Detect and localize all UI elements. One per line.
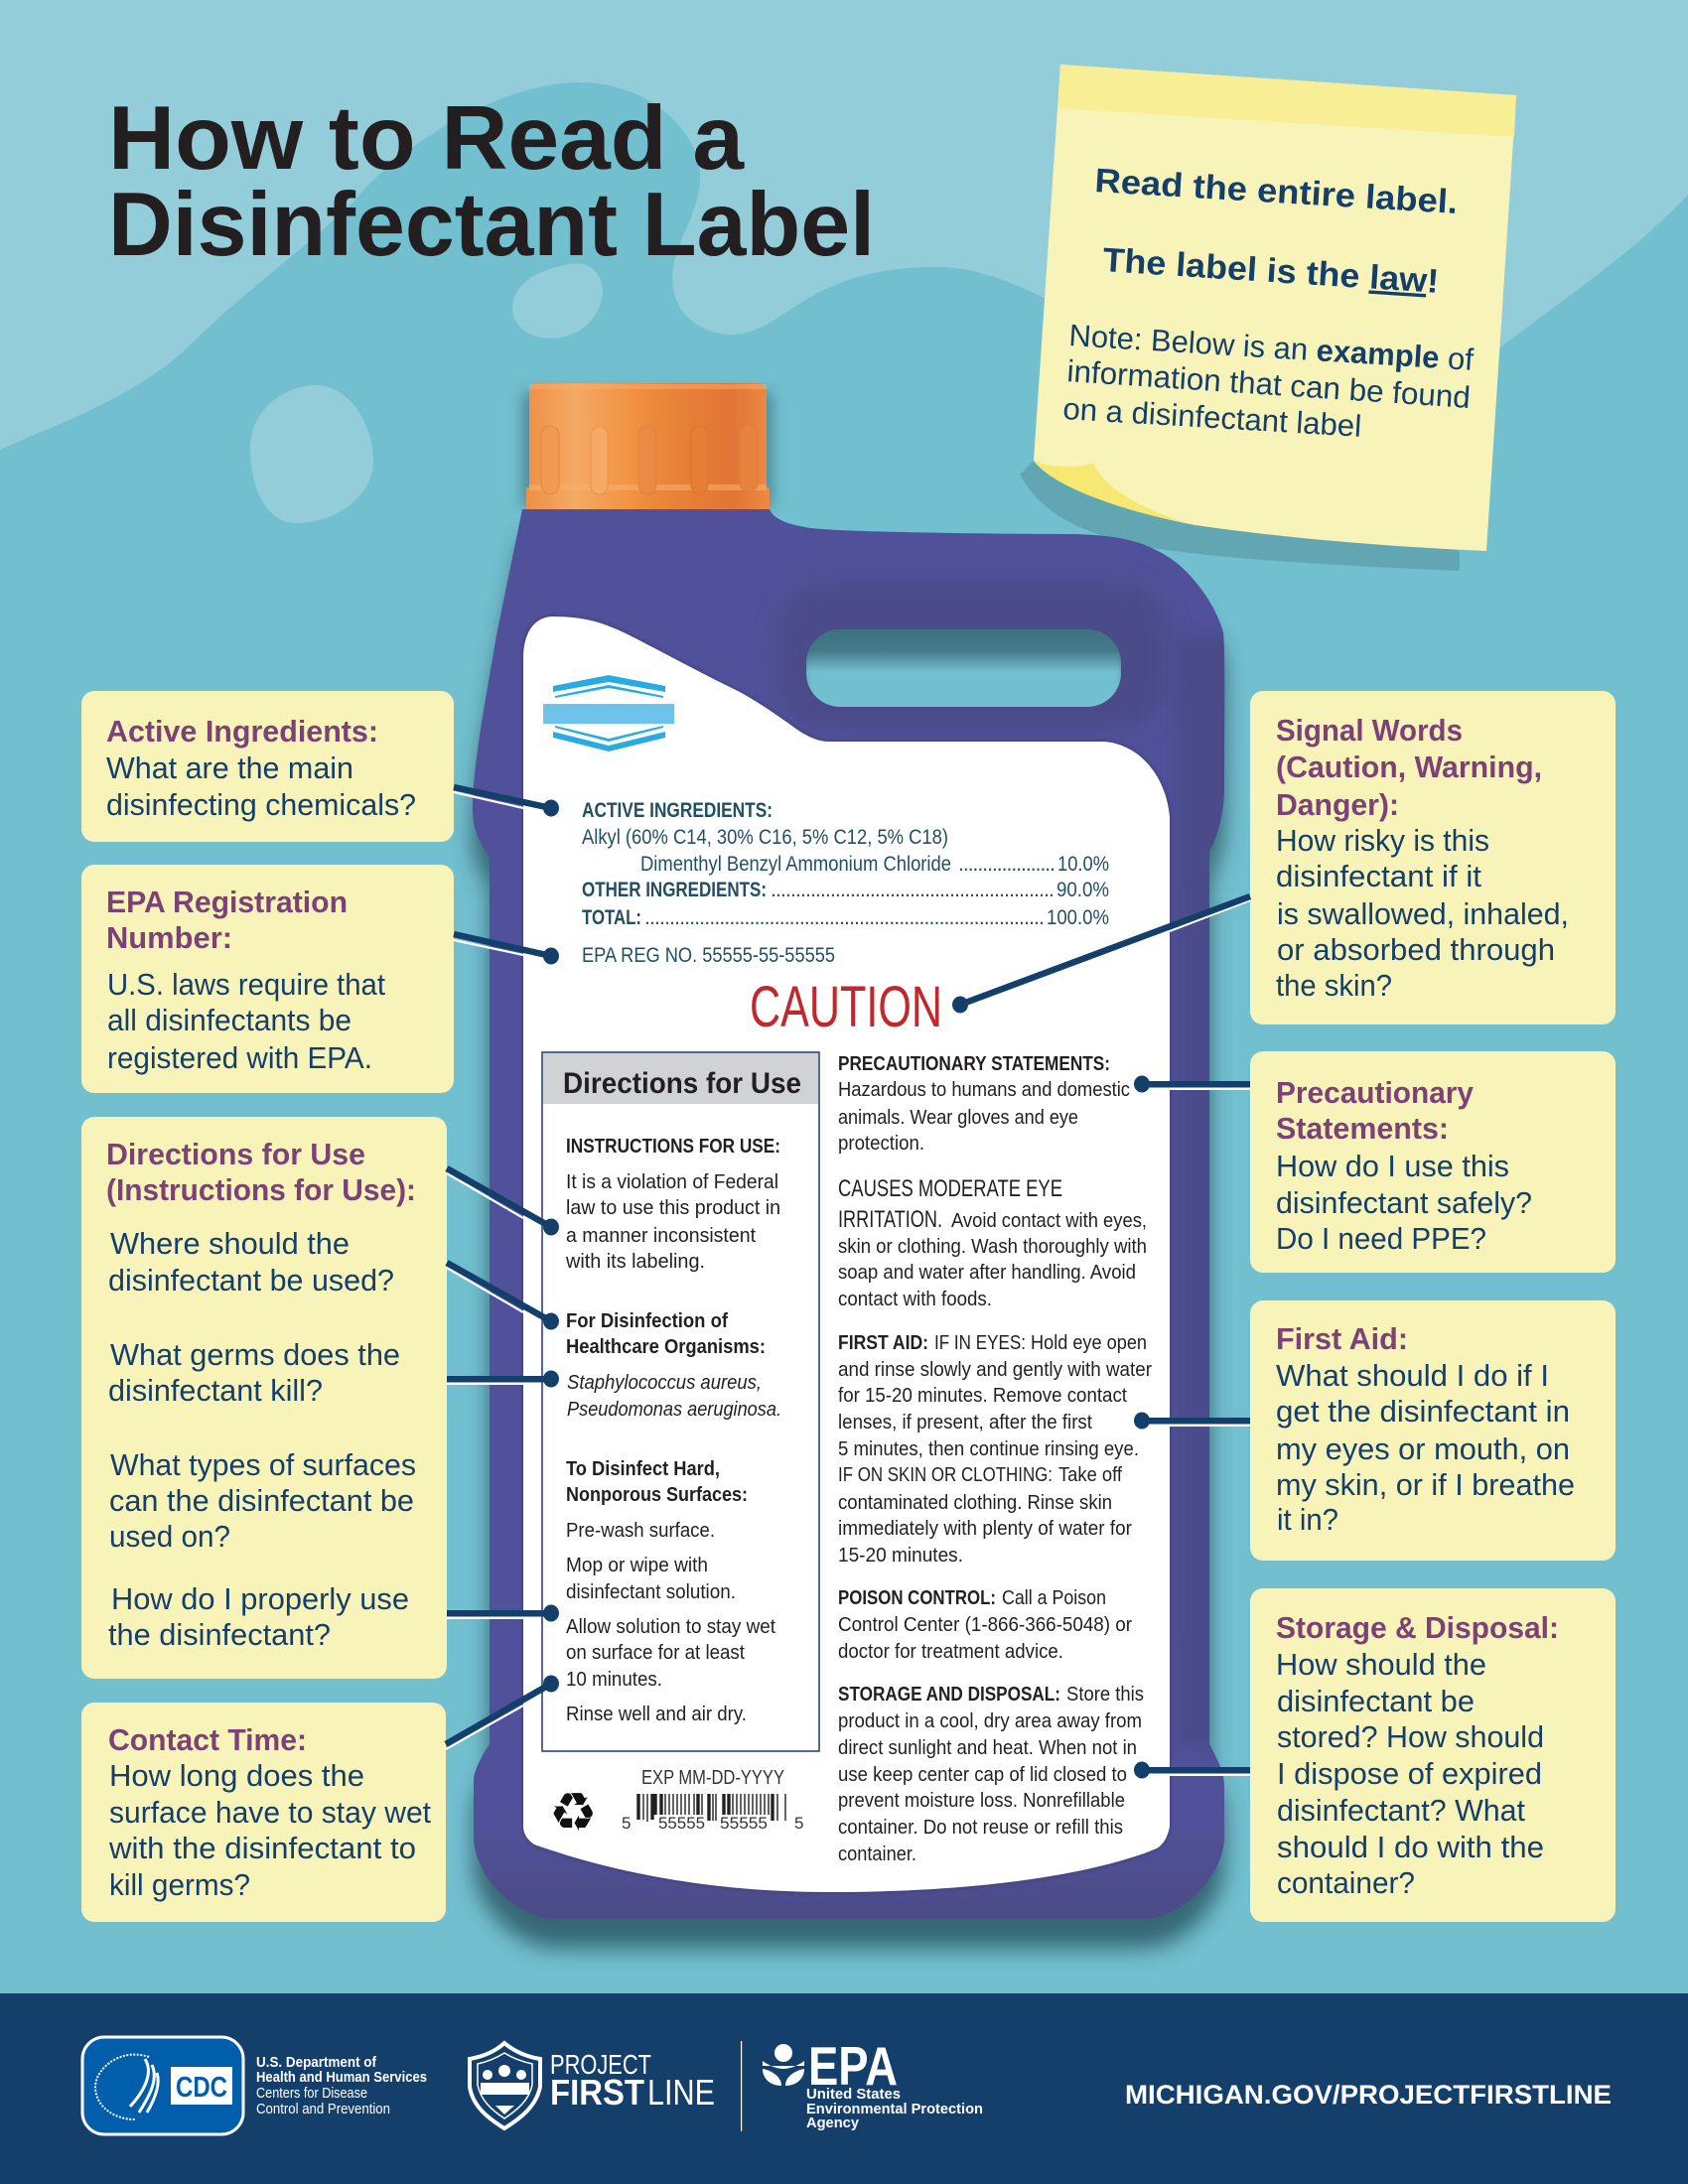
first aid text: IF IN EYES: [934,1331,1026,1354]
icon: recycling symbol: ♻ [549,1781,597,1843]
logo: Project Firstline: LINE [647,2072,715,2113]
precautionary statements text: soap and water after handling. Avoid [838,1261,1136,1284]
first aid text: for 15-20 minutes. Remove contact [838,1384,1127,1407]
panel: directions for use: 10 minutes. [566,1668,662,1691]
expiration date and barcode [622,1767,803,1833]
callout: signal words: (Caution, Warning, [1276,750,1542,784]
ingredient statement: ACTIVE INGREDIENTS: [582,799,773,822]
first aid text: lenses, if present, after the first [838,1411,1092,1433]
callout: precautionary statements: disinfectant safely? [1276,1185,1532,1220]
panel: directions for use: Allow solution to stay wet [566,1615,775,1638]
storage and disposal text: STORAGE AND DISPOSAL: [838,1683,1060,1706]
expiration date and barcode: 5 [794,1814,803,1833]
callout: signal words: How risky is this [1276,823,1489,858]
callout: EPA registration number: registered with EPA. [107,1040,372,1075]
callout: signal words [1250,691,1616,1024]
callout: signal words: the skin? [1276,968,1392,1003]
first aid text: FIRST AID: [838,1331,928,1354]
ingredient statement: OTHER INGREDIENTS: [582,879,767,901]
callout: first aid [1250,1300,1616,1561]
first aid text: immediately with plenty of water for [838,1517,1132,1540]
callout: storage and disposal: disinfectant be [1277,1684,1475,1718]
poison control text: doctor for treatment advice. [838,1640,1063,1663]
logo: EPA [763,2035,983,2131]
expiration date and barcode: 55555 [720,1814,768,1833]
callout: active ingredients [81,691,454,842]
callout: first aid: it in? [1277,1502,1338,1537]
storage and disposal text: container. Do not reuse or refill this [838,1816,1123,1839]
callout: storage and disposal: should I do with the [1277,1830,1544,1864]
callout: storage and disposal: How should the [1276,1647,1486,1682]
footer [0,1993,1688,2184]
panel: directions for use: INSTRUCTIONS FOR USE: [566,1135,780,1158]
panel: directions for use: Pre-wash surface. [566,1519,715,1542]
ingredient statement: ................................................................................ [644,906,1045,929]
storage and disposal text: use keep center cap of lid closed to [838,1763,1127,1786]
precautionary statements text: animals. Wear gloves and eye [838,1106,1078,1129]
callout: signal words: or absorbed through [1277,932,1555,967]
logo: CDC and HHS: U.S. Department of [256,2055,376,2071]
callout: contact time: How long does the [109,1758,364,1793]
panel: directions for use: For Disinfection of [566,1309,728,1332]
callout: contact time: surface have to stay wet [109,1795,431,1830]
leader line: precautionary statements [1134,1076,1250,1092]
leader line: surfaces [447,1370,559,1388]
callout: storage and disposal: disinfectant? What [1277,1793,1525,1828]
callout: signal words: Signal Words [1276,713,1463,748]
leader line: proper use [447,1604,559,1622]
precautionary statements text [838,1052,1147,1310]
logo: CDC and HHS: Control and Prevention [256,2102,390,2117]
callout: directions for use: How do I properly use [111,1581,409,1616]
callout: signal words: Danger): [1276,787,1399,822]
callout: directions for use: the disinfectant? [108,1617,331,1652]
callout: signal words: is swallowed, inhaled, [1277,896,1569,931]
storage and disposal text [838,1683,1144,1865]
EPA registration number: EPA REG NO. 55555-55-55555 [582,944,835,967]
callout: storage and disposal: Storage & Disposal: [1276,1610,1559,1645]
panel: directions for use: a manner inconsistent [566,1224,756,1247]
title: Disinfectant Label [108,175,875,275]
panel: directions for use: To Disinfect Hard, [566,1457,720,1480]
callout: directions for use: Directions for Use [106,1137,365,1171]
callout: first aid: my eyes or mouth, on [1276,1432,1570,1466]
panel: directions for use: Mop or wipe with [566,1554,708,1576]
expiration date and barcode: 55555 [658,1814,705,1833]
callout: precautionary statements [1250,1051,1616,1273]
expiration date and barcode: EXP MM-DD-YYYY [641,1767,784,1789]
logo: EPA: Agency [806,2116,859,2131]
callout: first aid: get the disinfectant in [1276,1394,1570,1429]
callout: storage and disposal [1250,1588,1616,1922]
storage and disposal text: Store this [1066,1683,1144,1706]
panel: directions for use [542,1052,819,1751]
callout: directions for use: What types of surfaces [110,1447,416,1482]
precautionary statements text: IRRITATION. [838,1206,942,1233]
storage and disposal text: prevent moisture loss. Nonrefillable [838,1789,1125,1812]
callout: active ingredients: Active Ingredients: [106,714,378,749]
callout: contact time: kill germs? [109,1867,250,1902]
sticky note: Note: Below is an example of [1068,318,1475,377]
callout: directions for use [81,1117,447,1679]
callout: signal words: disinfectant if it [1276,859,1481,893]
storage and disposal text: direct sunlight and heat. When not in [838,1736,1137,1759]
callout: directions for use: disinfectant kill? [108,1373,323,1408]
first aid text: 15-20 minutes. [838,1544,963,1567]
ingredient statement: 100.0% [1047,906,1109,929]
panel: directions for use: Rinse well and air dry. [566,1703,747,1725]
logo: Project Firstline: PROJECT [550,2049,651,2080]
precautionary statements text: protection. [838,1132,924,1155]
logo: EPA: United States [806,2087,901,2103]
panel: directions for use: Healthcare Organisms: [566,1335,766,1358]
ingredient statement: ......................................................... [771,879,1055,901]
first aid text: Hold eye open [1031,1331,1147,1354]
precautionary statements text: Avoid contact with eyes, [951,1209,1147,1232]
website url: MICHIGAN.GOV/PROJECTFIRSTLINE [1125,2080,1612,2110]
callout: contact time [81,1703,446,1922]
ingredient statement [582,799,1109,929]
leader line: contact time [446,1676,559,1749]
callout: storage and disposal: stored? How should [1277,1719,1544,1754]
callout: directions for use: can the disinfectant be [109,1483,414,1518]
ingredient statement: Alkyl (60% C14, 30% C16, 5% C12, 5% C18) [582,826,948,849]
ingredient statement: .................... [958,853,1055,876]
logo: EPA: Environmental Protection [806,2102,983,2117]
precautionary statements text: Hazardous to humans and domestic [838,1078,1130,1101]
poison control text: Control Center (1-866-366-5048) or [838,1613,1132,1636]
panel: directions for use: It is a violation of Federal [566,1170,778,1193]
callout: storage and disposal: I dispose of expired [1277,1756,1542,1791]
leader line: storage and disposal [1134,1761,1250,1779]
callout: first aid: my skin, or if I breathe [1276,1467,1575,1502]
bottle label [523,616,1170,1892]
sticky note: on a disinfectant label [1062,391,1362,444]
first aid text [838,1331,1152,1567]
precautionary statements text: PRECAUTIONARY STATEMENTS: [838,1052,1110,1075]
logo: CDC and HHS [82,2037,427,2134]
callout: first aid: What should I do if I [1276,1358,1549,1393]
precautionary statements text: CAUSES MODERATE EYE [838,1175,1062,1202]
first aid text: contaminated clothing. Rinse skin [838,1491,1112,1514]
ingredient statement: 10.0% [1057,853,1109,876]
ingredient statement: TOTAL: [582,906,641,929]
callout: EPA registration number: all disinfectants be [107,1003,352,1037]
callout: precautionary statements: How do I use this [1276,1149,1509,1183]
leader line: germs [447,1263,559,1330]
first aid text: 5 minutes, then continue rinsing eye. [838,1437,1139,1460]
callout: precautionary statements: Statements: [1276,1111,1449,1146]
sticky note [1020,65,1516,571]
poison control text [838,1586,1132,1663]
callout: active ingredients: disinfecting chemicals? [106,787,416,822]
first aid text: Take off [1058,1463,1122,1486]
logo: Project Firstline: FIRST [550,2072,644,2113]
first aid text: IF ON SKIN OR CLOTHING: [838,1463,1053,1486]
precautionary statements text: skin or clothing. Wash thoroughly with [838,1235,1147,1258]
logo: EPA: EPA [808,2035,898,2097]
signal word: CAUTION [750,975,942,1039]
callout: directions for use: (Instructions for Use): [106,1172,416,1207]
panel: directions for use: Staphylococcus aureus, [567,1371,762,1394]
panel: directions for use: with its labeling. [565,1250,705,1273]
callout: contact time: Contact Time: [108,1722,307,1757]
storage and disposal text: container. [838,1843,916,1865]
panel: directions for use: Nonporous Surfaces: [566,1483,748,1506]
callout: precautionary statements: Precautionary [1276,1075,1475,1110]
leader line: EPA registration [454,934,559,965]
expiration date and barcode: 5 [622,1814,631,1833]
callout: active ingredients: What are the main [106,751,353,785]
callout: directions for use: Where should the [110,1226,350,1261]
storage and disposal text: product in a cool, dry area away from [838,1709,1142,1732]
callout: EPA registration number: Number: [106,920,232,955]
ingredient statement: 90.0% [1056,879,1109,901]
precautionary statements text: contact with foods. [838,1288,992,1310]
ingredient statement: Dimenthyl Benzyl Ammonium Chloride [640,853,951,876]
callout: storage and disposal: container? [1277,1865,1415,1900]
panel: directions for use: on surface for at least [566,1641,745,1664]
icon: product logo [543,675,674,751]
logo: CDC and HHS: Health and Human Services [256,2070,427,2086]
callout: directions for use: What germs does the [110,1337,400,1372]
title [108,88,875,275]
leader line: signal words [952,896,1250,1013]
leader line: first aid [1134,1412,1250,1430]
logo: CDC and HHS: CDC [176,2072,227,2104]
first aid text: and rinse slowly and gently with water [838,1358,1152,1381]
callout: directions for use: used on? [109,1519,230,1554]
leader line: active ingredients [454,787,559,816]
panel: directions for use: Directions for Use [563,1067,801,1100]
bottle [473,383,1236,1949]
panel: directions for use: law to use this product in [566,1196,780,1219]
poison control text: POISON CONTROL: [838,1586,996,1609]
callout: EPA registration number: EPA Registration [106,885,348,919]
callout: precautionary statements: Do I need PPE? [1276,1221,1486,1256]
sticky note: The label is the law! [1101,241,1440,301]
bottle cap [526,383,770,509]
callout: directions for use: disinfectant be used? [108,1263,394,1297]
sticky note: information that can be found [1066,353,1472,415]
leader line: where to use [447,1168,559,1235]
callout: first aid: First Aid: [1276,1321,1408,1356]
logo: Project Firstline [470,2043,715,2128]
callout: EPA registration number: U.S. laws require that [107,967,385,1002]
logo: CDC and HHS: Centers for Disease [256,2086,367,2102]
poison control text: Call a Poison [1002,1586,1106,1609]
handle opening [806,629,1121,707]
callout: contact time: with the disinfectant to [108,1831,416,1865]
title: How to Read a [108,88,745,189]
panel: directions for use: disinfectant solution. [566,1580,736,1603]
panel: directions for use: Pseudomonas aeruginosa. [567,1398,781,1421]
callout: EPA registration number [81,865,454,1093]
sticky note: Read the entire label. [1094,162,1459,221]
